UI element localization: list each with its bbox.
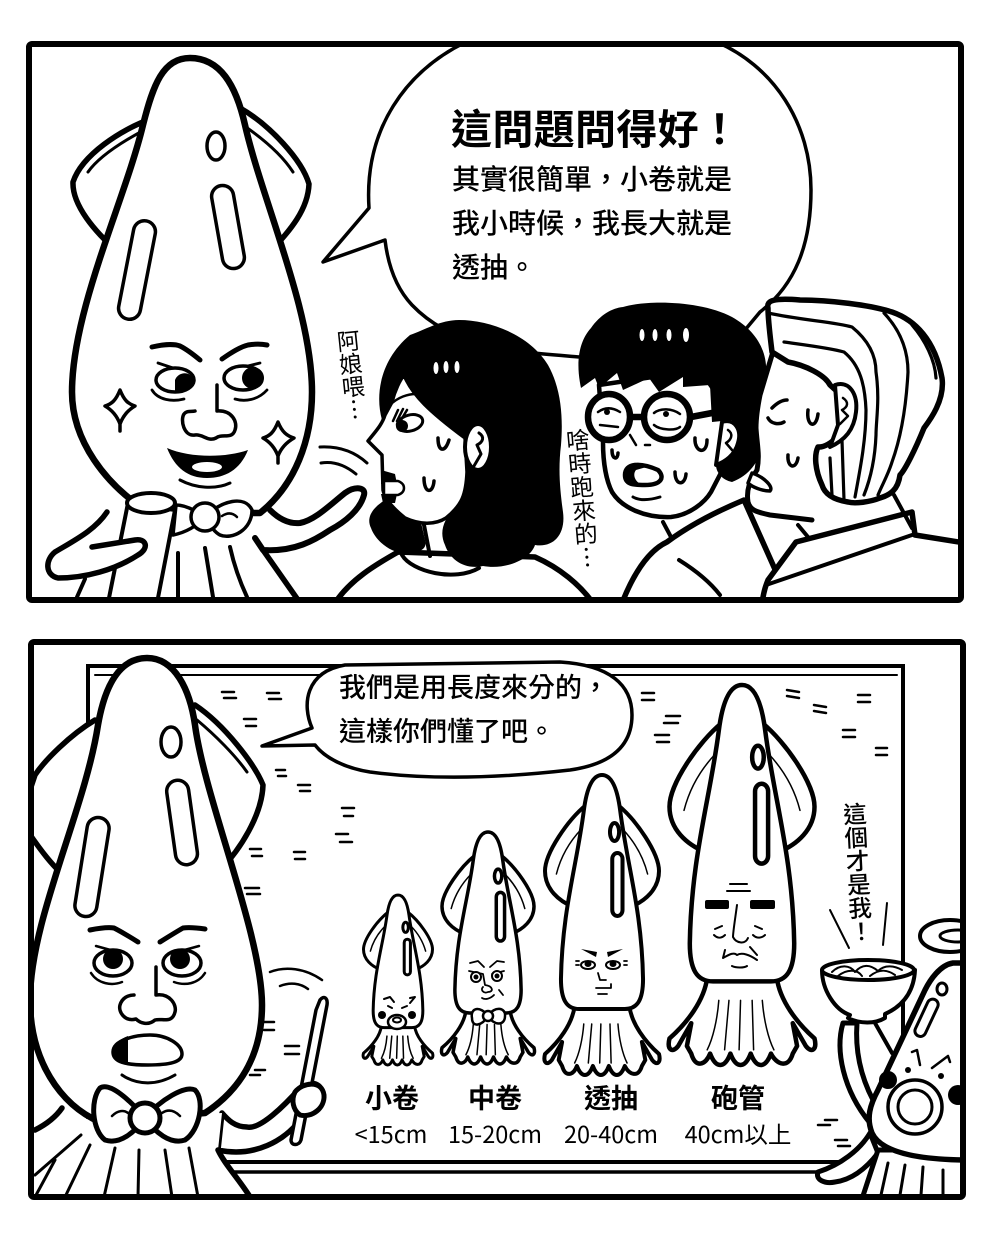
text block: explanation: 我小時候，我長大就是	[452, 202, 732, 242]
big squid: tentacle skirt	[35, 1108, 252, 1200]
body	[869, 963, 970, 1160]
bubble text: 我們是用長度來分的，	[339, 666, 609, 705]
exclamation: when did it come: 啥時跑來的…	[560, 426, 606, 570]
squid character: mantle body	[72, 58, 312, 513]
arm	[840, 1023, 873, 1123]
panel frame	[31, 642, 963, 1197]
face	[469, 961, 504, 999]
face	[576, 949, 627, 994]
icon: sparkle right	[263, 422, 294, 463]
exclamation: this is me: 這個才是我！	[837, 801, 879, 944]
labels under squids: 中卷	[468, 1077, 522, 1116]
man with pompadour	[747, 299, 965, 603]
squid: 透抽	[544, 775, 660, 1075]
noodle bowl	[822, 960, 915, 1022]
halo	[920, 920, 980, 952]
labels under squids: 40cm以上	[685, 1116, 791, 1150]
squid character: left fin	[70, 120, 141, 242]
big squid: spots	[73, 727, 199, 918]
icon: sparkle left	[105, 390, 135, 431]
squid face	[152, 344, 267, 487]
woman with dark hair	[335, 320, 593, 603]
labels under squids: 15-20cm	[448, 1116, 542, 1150]
squid: 小卷	[363, 895, 433, 1065]
bow tie	[173, 501, 252, 536]
bubble text: 這樣你們懂了吧。	[339, 710, 555, 749]
labels under squids: 透抽	[584, 1077, 638, 1116]
big squid: arm and pointer	[218, 998, 327, 1152]
speech bubble: main answer	[323, 40, 811, 360]
labels under squids: 砲管	[711, 1077, 765, 1116]
big squid: left fin	[34, 717, 96, 870]
small squid holding noodles	[814, 902, 960, 1194]
lower arm	[817, 1133, 878, 1183]
big squid: bow tie	[94, 1087, 200, 1141]
motion lines	[320, 447, 367, 474]
man with glasses	[578, 303, 790, 603]
motion lines	[270, 969, 322, 989]
squid spots	[117, 132, 246, 321]
labels under squids	[356, 1084, 790, 1145]
labels under squids: <15cm	[355, 1116, 427, 1150]
bow tie	[472, 1009, 505, 1025]
chalkboard	[88, 666, 903, 1172]
face	[378, 997, 416, 1029]
text block: explanation	[452, 158, 732, 286]
face	[705, 884, 775, 968]
squid: 中卷	[442, 832, 534, 1064]
bubble text	[339, 666, 609, 749]
squid character: right fin	[240, 108, 309, 250]
heading: good question: 這問題問得好！	[451, 96, 740, 156]
squid character: tentacle skirt and right arm	[176, 485, 368, 597]
held cylinder	[108, 493, 175, 603]
big squid: right fin	[195, 705, 263, 870]
text block: explanation: 透抽。	[452, 246, 536, 286]
exclamation: mother gasp: 阿娘喂…	[330, 327, 374, 423]
squid character: left arm and hand	[48, 512, 145, 597]
labels under squids: 小卷	[365, 1077, 419, 1116]
speech bubble: length	[262, 662, 632, 777]
chalk dashes	[222, 690, 887, 1146]
panel: squid explains it grew up	[29, 40, 965, 603]
panel: length classification	[20, 642, 980, 1205]
squid: 砲管	[669, 685, 815, 1065]
emphasis lines	[830, 903, 887, 948]
labels under squids: 20-40cm	[564, 1116, 658, 1150]
panel frame	[29, 44, 961, 600]
skirt	[860, 1150, 970, 1205]
big squid: face	[90, 928, 205, 1083]
text block: explanation: 其實很簡單，小卷就是	[452, 158, 732, 198]
big squid: mantle body	[30, 658, 262, 1122]
